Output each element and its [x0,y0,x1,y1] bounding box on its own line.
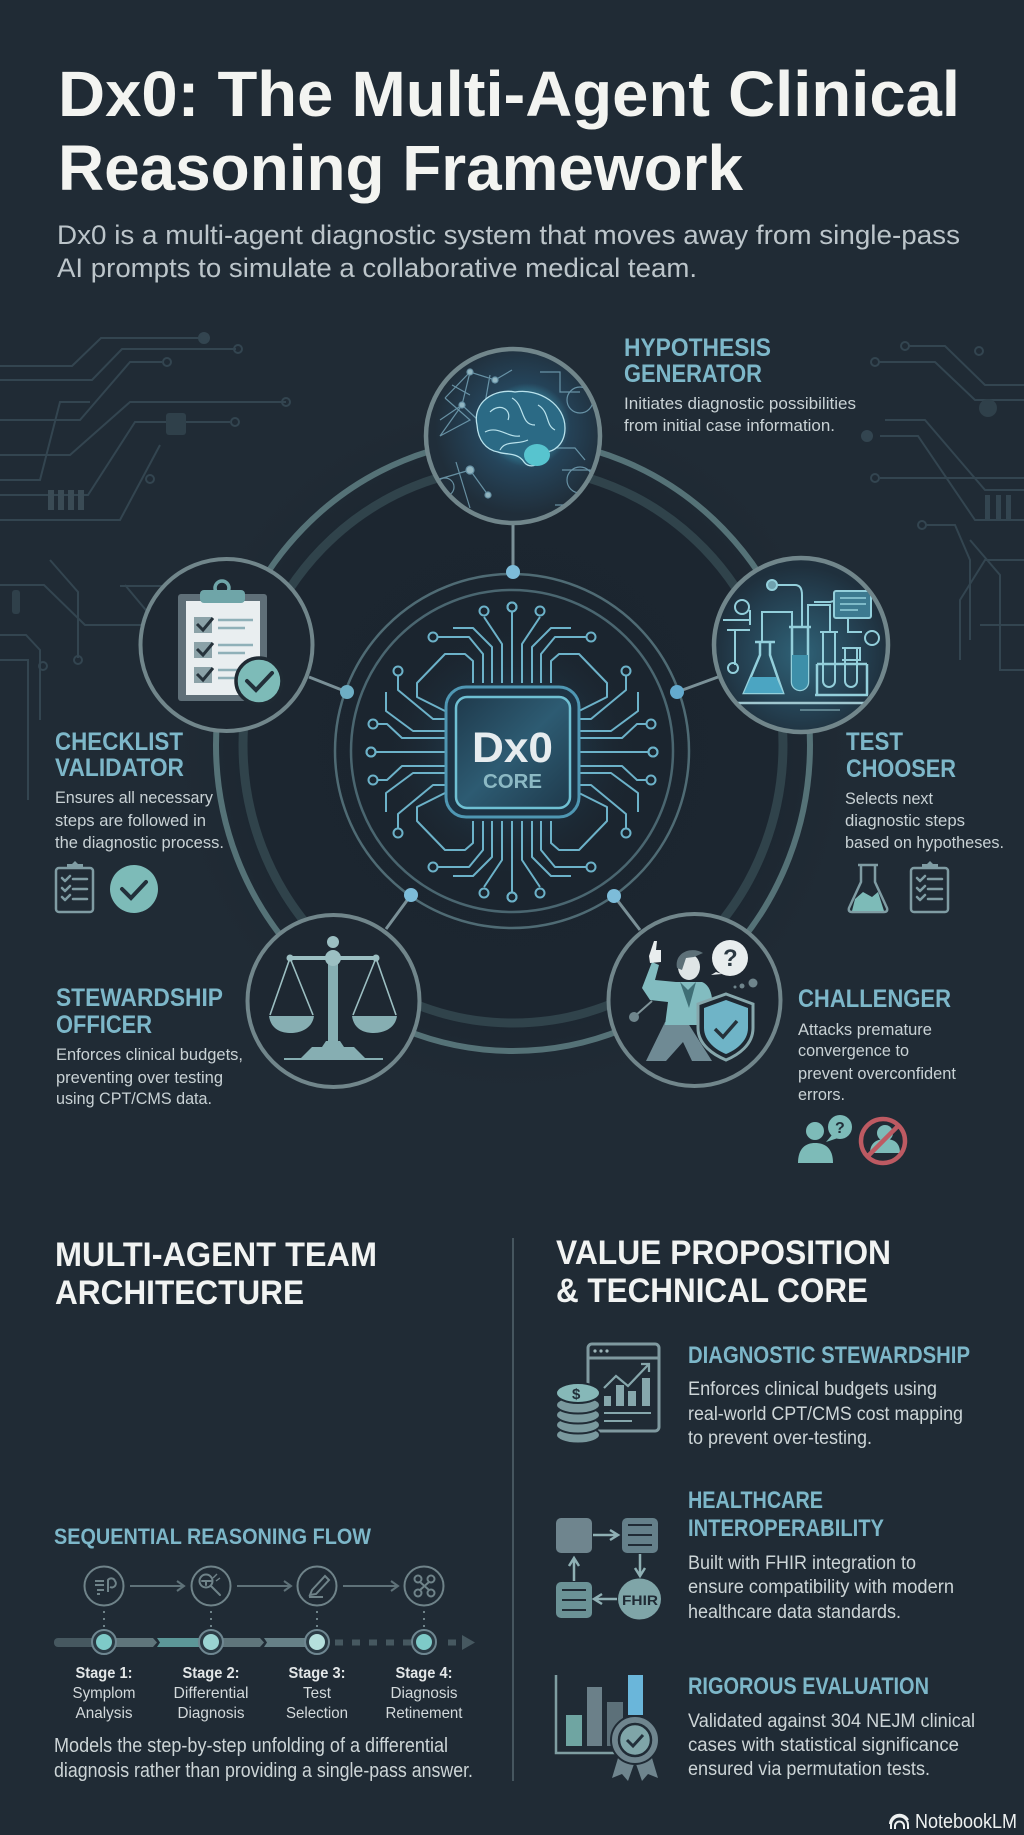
stage labels: Diagnosis [390,1685,458,1702]
icon: FHIR interoperability [556,1518,661,1620]
heading: sequential reasoning flow: SEQUENTIAL REASONING FLOW [54,1524,371,1549]
flow caption: Models the step-by-step unfolding of a differential [54,1735,448,1757]
Dx0 core chip [366,602,658,902]
stage labels: Selection [286,1705,348,1722]
heading: multi-agent team architecture: ARCHITECTURE [55,1274,304,1312]
label: stewardship officer: OFFICER [56,1011,152,1039]
label: challenger [798,985,956,1104]
label: challenger: convergence to [798,1041,909,1060]
outer orbit ring [216,439,810,1051]
icon: person question: ? [835,1120,845,1137]
icon: small clipboard [56,861,93,912]
stage labels: Differential [174,1685,248,1702]
label: hypothesis generator [624,334,856,435]
label: hypothesis generator: HYPOTHESIS [624,334,771,362]
block: diagnostic stewardship: to prevent over-testing. [688,1428,872,1449]
subtitle: AI prompts to simulate a collaborative medical team. [57,253,697,283]
label: hypothesis generator: from initial case information. [624,416,835,435]
divider [512,1238,514,1781]
label: stewardship officer [56,984,243,1108]
label: test chooser [845,728,1004,852]
stage labels: Stage 2: [182,1665,240,1682]
title: Reasoning Framework [58,132,743,204]
label: challenger: errors. [798,1085,845,1104]
label: stewardship officer: STEWARDSHIP [56,984,223,1012]
block: healthcare interoperability: ensure compatibility with modern [688,1577,954,1598]
label: test chooser: CHOOSER [846,755,956,783]
label: test chooser: based on hypotheses. [845,833,1004,852]
agent: test chooser icon [714,558,888,732]
stage labels: Stage 4: [396,1665,452,1682]
stage labels: Diagnosis [178,1705,244,1722]
icon: coins and chart: $ [572,1386,581,1403]
block: diagnostic stewardship: Enforces clinical budgets using [688,1379,937,1400]
icon: prohibited person [861,1119,905,1163]
icon: coins and chart [556,1344,659,1444]
background shade behind orbit [163,385,863,1105]
stage labels: Retinement [386,1705,463,1722]
stage labels: Stage 1: [76,1665,132,1682]
label: test chooser: TEST [846,728,903,756]
agent: stewardship officer icon [248,915,420,1087]
icon: evaluation chart [556,1675,659,1781]
subtitle [57,220,960,283]
agent: challenger icon [608,914,780,1086]
block: healthcare interoperability [688,1487,954,1623]
label: challenger: CHALLENGER [798,985,951,1013]
block: diagnostic stewardship: DIAGNOSTIC STEWARDSHIP [688,1342,970,1369]
label: checklist validator: the diagnostic process. [55,833,224,852]
label: checklist validator: CHECKLIST [55,728,183,756]
stage icons [84,1566,444,1628]
block: diagnostic stewardship [688,1342,970,1449]
label: checklist validator: steps are followed in [55,811,206,830]
stage labels: Symplom [72,1685,136,1702]
heading: multi-agent team architecture [55,1236,377,1312]
label: test chooser: Selects next [845,789,933,808]
icon: small flask [849,865,887,912]
flow caption [54,1735,473,1782]
icon: person question [798,1115,852,1163]
connectors [309,524,718,930]
core rings [335,574,689,928]
stage labels [72,1665,463,1722]
label: challenger: prevent overconfident [798,1064,956,1083]
block: rigorous evaluation: RIGOROUS EVALUATION [688,1673,929,1700]
label: checklist validator: VALIDATOR [55,754,184,782]
Dx0 core chip: Dx0 [472,724,553,772]
label: stewardship officer: using CPT/CMS data. [56,1089,212,1108]
icon: check badge [110,865,158,913]
title: Dx0: The Multi-Agent Clinical [58,58,960,130]
sequential flow chart [54,1566,475,1722]
heading: value proposition [556,1234,891,1310]
background circuit pattern right [862,342,1024,670]
block: rigorous evaluation: Validated against 304 NEJM clinical [688,1711,975,1732]
agent: checklist validator icon [140,559,312,731]
label: checklist validator: Ensures all necessary [55,788,213,807]
label: test chooser: diagnostic steps [845,811,965,830]
icon: small clipboard test [911,861,948,912]
block: diagnostic stewardship: real-world CPT/CMS cost mapping [688,1404,963,1425]
stage labels: Stage 3: [288,1665,346,1682]
Dx0 core chip: CORE [483,771,542,793]
agent: hypothesis generator icon [426,349,600,523]
label: hypothesis generator: Initiates diagnostic possibilities [624,394,856,413]
block: healthcare interoperability: HEALTHCARE [688,1487,823,1514]
block: healthcare interoperability: INTEROPERABILITY [688,1515,884,1542]
heading: multi-agent team architecture: MULTI-AGENT TEAM [55,1236,377,1274]
icon: FHIR interoperability: FHIR [622,1592,658,1608]
label: stewardship officer: preventing over testing [56,1068,223,1087]
subtitle: Dx0 is a multi-agent diagnostic system that moves away from single-pass [57,220,960,250]
label: stewardship officer: Enforces clinical budgets, [56,1045,243,1064]
block: healthcare interoperability: Built with FHIR integration to [688,1553,916,1574]
block: healthcare interoperability: healthcare data standards. [688,1602,901,1623]
label: challenger: Attacks premature [798,1020,932,1039]
block: rigorous evaluation: cases with statistical significance [688,1735,959,1756]
timeline bar [54,1630,475,1654]
flow caption: diagnosis rather than providing a single-pass answer. [54,1760,473,1782]
title [58,58,960,204]
label: checklist validator [55,728,224,852]
heading: value proposition: VALUE PROPOSITION [556,1234,891,1272]
block: rigorous evaluation: ensured via permutation tests. [688,1759,930,1780]
block: rigorous evaluation [688,1673,975,1780]
stage labels: Test [303,1685,332,1702]
label: hypothesis generator: GENERATOR [624,360,762,388]
circuit traces [366,602,658,902]
agent: challenger icon: ? [723,945,738,972]
heading: value proposition: & TECHNICAL CORE [556,1272,868,1310]
arrows [130,1581,398,1591]
stage labels: Analysis [76,1705,132,1722]
background circuit pattern left [0,333,290,800]
